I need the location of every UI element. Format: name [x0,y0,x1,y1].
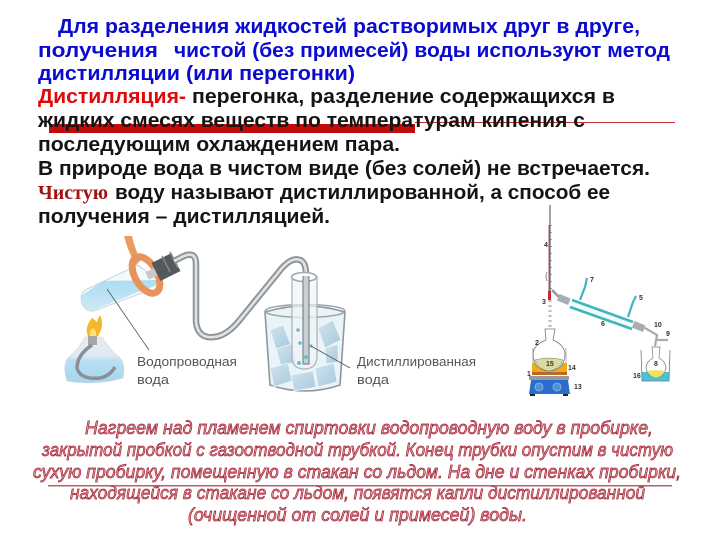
part numbers: 16 [633,373,641,380]
icon: beaker with ice cubes and inner test tube [265,272,345,391]
red underline band [49,122,675,133]
label: tap water: вода [137,372,170,387]
label: distilled water: вода [357,372,390,387]
icon: receiving adapter [645,328,668,346]
heading paragraph: blue introduction: Для разделения жидкостей растворимых друг в друге, [58,16,640,38]
description paragraph: red outlined italic text: (очищенной от солей и примесей) воды. [188,505,527,525]
part numbers: 2 [535,340,539,347]
part numbers: 6 [601,321,605,328]
heading paragraph: blue introduction: чистой (без примесей) воды используют метод [174,40,670,62]
definition paragraph: distillation: перегонка, разделение содержащихся в [192,86,615,108]
diagram: laboratory distillation apparatus [527,205,670,396]
definition paragraph: distillation: последующим охлаждением пара. [38,134,400,156]
part numbers: 3 [542,299,546,306]
definition paragraph: distillation: получения – дистилляцией. [38,206,330,228]
label: distilled water [357,354,476,387]
icon: gas outlet tube [174,255,306,364]
icon: test tube with tap water [81,265,158,311]
definition paragraph: distillation: Дистилляция- [38,86,186,108]
part numbers: 5 [639,295,643,302]
icon: condenser [557,278,646,332]
icon: receiver flask in cooling bath [641,347,670,381]
part numbers: 8 [654,361,658,368]
part numbers: 1 [527,371,531,378]
icon: thermometer [546,205,551,300]
icon: spirit lamp with flame [65,315,124,383]
definition paragraph: distillation: В природе вода в чистом виде (без солей) не встречается. [38,158,650,180]
definition paragraph: distillation: жидких смесях веществ по температурам кипения с [37,110,585,132]
description paragraph: red outlined italic text [33,418,681,525]
icon: orange clamp [124,236,166,298]
diagram: test tube, spirit lamp and ice beaker [65,236,476,391]
part numbers: 4 [544,242,548,249]
part numbers: 10 [654,322,662,329]
heading paragraph: blue introduction [38,16,670,85]
leader line: distilled water [311,346,350,368]
icon: heating bath and stirrer [529,348,570,396]
part numbers: 15 [546,361,554,368]
label: tap water [137,354,237,387]
part numbers: 13 [574,384,582,391]
icon: boiling flask [533,300,565,371]
definition paragraph: distillation: Чистую [38,182,108,204]
thin red divider line [48,485,672,486]
part numbers: 9 [666,331,670,338]
icon: still head [552,290,566,299]
definition paragraph: distillation: воду называют дистиллированной, а способ ее [115,182,610,204]
description paragraph: red outlined italic text: сухую пробирку, помещенную в стакан со льдом. На дне и стенках пробирки, [33,462,681,482]
description paragraph: red outlined italic text: закрытой пробкой с газоотводной трубкой. Конец трубки опустим в чистую [41,440,673,460]
heading paragraph: blue introduction: получения [38,40,158,62]
heading paragraph: blue introduction: дистилляции (или перегонки) [38,63,355,85]
part numbers: 7 [590,277,594,284]
definition paragraph: distillation [37,86,650,228]
description paragraph: red outlined italic text: находящейся в стакане со льдом, появятся капли дистиллированной [70,483,645,503]
description paragraph: red outlined italic text: Нагреем над пламенем спиртовки водопроводную воду в пробирке, [85,418,653,438]
icon: rubber stopper [147,252,178,276]
water drops [296,328,313,365]
ice cubes [270,320,341,391]
label: distilled water: Дистиллированная [357,354,476,369]
label: tap water: Водопроводная [137,354,237,369]
part numbers [527,242,670,391]
leader line: tap water [107,289,149,350]
part numbers: 14 [568,365,576,372]
